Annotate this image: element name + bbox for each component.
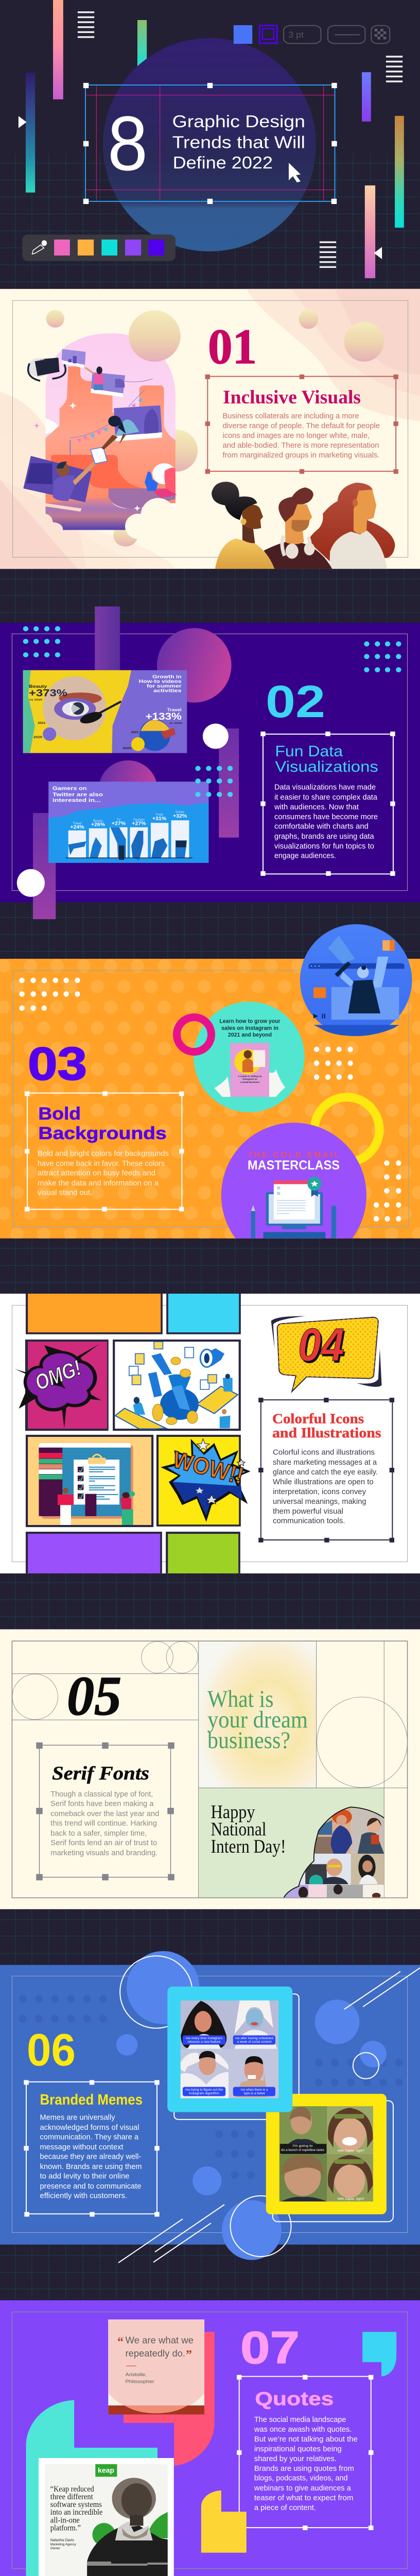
body text: diverse range of people. The default for people — [222, 422, 380, 430]
image labels: 2020 — [122, 747, 131, 750]
body text: But we’re not talking about the — [254, 2435, 358, 2444]
instagram guide text: sales on Instagram in — [221, 1025, 278, 1031]
quote text: Philosopher — [126, 2379, 154, 2385]
keap text: all-in-one — [50, 2516, 80, 2524]
title: Trends that Will — [172, 133, 305, 151]
heading: Fun Data — [275, 743, 343, 760]
chart labels: Travel — [73, 822, 81, 825]
number 07: 07 — [240, 2322, 300, 2373]
ring: pink — [177, 1017, 211, 1052]
body text: Though a classical type of font, — [50, 1790, 153, 1799]
image labels: 2020 — [33, 736, 42, 739]
body text: shared by your relatives. — [254, 2455, 337, 2463]
body text: visual stand out. — [38, 1189, 92, 1197]
body text: marketing visuals and branding. — [50, 1849, 157, 1857]
title — [108, 100, 305, 187]
heading — [272, 1411, 381, 1440]
instagram guide text: 2021 and beyond — [228, 1032, 272, 1038]
hero circle — [103, 38, 316, 251]
chart labels: +24% — [70, 824, 84, 831]
illustration: collaborative screens — [23, 310, 181, 539]
illustration: three people — [212, 482, 395, 569]
chart labels: +31% — [152, 816, 167, 822]
instagram guide text: a Small Business — [240, 1081, 260, 1083]
chart labels: TV — [117, 819, 120, 822]
comic panels — [12, 1294, 408, 1573]
body text: visualizations for fun topics to — [274, 842, 374, 851]
instagram guide text: Learn how to grow your — [219, 1019, 281, 1025]
section background and quote shapes — [0, 2300, 420, 2576]
selection frame — [83, 83, 337, 204]
purple circle: email masterclass — [221, 1123, 366, 1239]
sample: dream business — [207, 1686, 308, 1754]
body text: known. Brands are using them — [40, 2163, 142, 2171]
bar chart: gamers on twitter — [48, 782, 208, 863]
body text: comfortable with charts and — [274, 823, 369, 831]
body text — [274, 784, 378, 860]
keap text: software systems — [50, 2500, 102, 2509]
body text: acknowledged forms of visual — [40, 2124, 139, 2132]
meme captions: me trying to figure out the — [185, 2088, 223, 2092]
body text: attract attention on busy feeds and — [38, 1170, 155, 1178]
blue circle: megaphone hero — [300, 924, 412, 1036]
meme captions: I'm going to — [292, 2144, 313, 2148]
panel: 01 inclusive visuals — [0, 289, 420, 569]
title: 8 — [108, 100, 148, 187]
number 04 shadow: 04 — [300, 1321, 346, 1373]
image labels: +373% — [29, 688, 67, 699]
quote text: “ — [117, 2335, 124, 2349]
illustration: OMG burst — [15, 1344, 101, 1428]
keap text: platform.” — [50, 2523, 81, 2532]
image labels: Growth in — [152, 674, 182, 680]
image labels: Travel — [167, 707, 182, 712]
meme captions: With Zapier, right? — [338, 2149, 364, 2153]
icon: cursor — [289, 163, 301, 182]
meme captions: me after having scheduled — [235, 2037, 274, 2040]
body text: webinars to give audiences a — [254, 2484, 352, 2493]
number 03: 03 — [28, 1039, 87, 1090]
keap text: Marketing Agency — [50, 2543, 77, 2546]
burst word: WOW!! — [170, 1446, 247, 1489]
body text: consumers have become more — [274, 813, 378, 821]
illustration: WOW burst — [161, 1439, 251, 1522]
sample: dream business: What is — [207, 1686, 274, 1713]
inner frame and dots — [13, 970, 409, 1227]
toolbar — [234, 25, 390, 44]
body text: inspirational quotes being — [254, 2445, 342, 2453]
heading: Backgrounds — [38, 1124, 167, 1143]
panel: 07 quotes — [0, 2300, 420, 2576]
body text: teaser of what to expect from — [254, 2494, 353, 2502]
masterclass shapes — [221, 1123, 366, 1239]
panel: 04 colorful icons and illustrations — [0, 1294, 420, 1573]
ring — [231, 2196, 291, 2257]
chart image: how-to videos — [23, 670, 187, 753]
heading: Visualizations — [275, 758, 378, 775]
illustration: checklist board — [39, 1443, 135, 1525]
meme captions — [281, 2144, 364, 2201]
body text: Serif fonts have been making a — [50, 1800, 154, 1808]
image labels: for summer — [147, 684, 182, 689]
heading: Colorful Icons — [272, 1411, 364, 1426]
image labels: Beauty — [29, 684, 47, 689]
keap text: into an incredible — [50, 2508, 102, 2517]
number 05: 05 — [67, 1666, 121, 1727]
section background and decor — [0, 1951, 420, 2245]
panel: 06 branded memes — [0, 1951, 420, 2263]
body text: icons and images are no longer white, male, — [222, 432, 370, 440]
body text: Data visualizations have made — [274, 784, 376, 792]
meme card: cyan — [167, 1987, 299, 2120]
text box frame — [258, 1398, 394, 1543]
quote text — [117, 2335, 194, 2385]
keap text: “Keap reduced — [50, 2485, 94, 2494]
body text: While illustrations are open to — [273, 1478, 374, 1486]
body text: communication. They share a — [40, 2133, 139, 2142]
section background and grid — [0, 1629, 420, 1909]
sample: intern day text — [211, 1802, 286, 1857]
meme captions: With Zapier, right? — [338, 2197, 364, 2201]
body text: The social media landscape — [254, 2416, 346, 2424]
section background and decor — [0, 606, 420, 919]
sample: intern day text: National — [211, 1819, 267, 1840]
body text: Bold and bright colors for backgrounds — [38, 1150, 169, 1158]
heading: Inclusive Visuals — [223, 387, 361, 408]
body text: with audiences. Now that — [274, 803, 359, 811]
heading: Bold — [38, 1104, 81, 1124]
chart bars — [48, 782, 208, 863]
bottom decor circles — [118, 2196, 291, 2263]
burst shape — [161, 1439, 251, 1522]
text box frame — [36, 1742, 174, 1880]
masterclass text — [248, 1152, 339, 1170]
body text: them powerful visual — [273, 1507, 343, 1516]
body text — [273, 1449, 378, 1526]
chart labels: Gamers on — [52, 785, 87, 791]
meme captions — [185, 2037, 274, 2095]
dot cluster — [195, 766, 233, 797]
quote text: repeatedly do. — [126, 2348, 185, 2359]
ring: yellow — [314, 1097, 379, 1162]
keap text: keap — [98, 2466, 114, 2475]
meme captions: do a bunch of repetitive tasks — [281, 2148, 325, 2152]
body text: make the data and information on a — [38, 1179, 159, 1188]
chart labels — [52, 785, 187, 831]
bubble shape — [271, 1316, 382, 1392]
quote text: We are what we — [126, 2335, 194, 2346]
body text: universal meanings, making — [273, 1498, 366, 1506]
number 04: 04 — [298, 1319, 344, 1371]
card shapes — [108, 2319, 204, 2415]
image labels: How-to videos — [139, 679, 182, 685]
body text: presence and to communicate — [40, 2182, 141, 2191]
body text: Serif fonts lend an air of trust to — [50, 1839, 157, 1848]
instagram guide text: A Guide to Selling on — [238, 1075, 262, 1078]
heading: and Illustrations — [272, 1425, 381, 1440]
title: Define 2022 — [173, 153, 273, 172]
filled circle — [222, 2200, 282, 2260]
body text: from marginalized groups in marketing visuals. — [222, 451, 380, 460]
card and photos — [266, 2094, 393, 2222]
masterclass text: THE COLD EMAIL — [248, 1151, 339, 1159]
panel: 05 serif fonts — [0, 1629, 420, 1909]
body text: graphs, brands are using data — [274, 833, 375, 841]
meme captions: Instagram algorithm — [189, 2092, 219, 2095]
body text: back to a safer, simpler time, — [50, 1829, 147, 1838]
sample: dream business: your dream — [207, 1706, 308, 1733]
header decorations — [19, 0, 404, 278]
quote text: ” — [186, 2348, 192, 2362]
body text — [38, 1150, 169, 1197]
text box frame — [25, 1091, 184, 1211]
image labels: activities — [153, 688, 182, 694]
image labels: 2021 — [131, 731, 139, 734]
body text: message without context — [40, 2143, 124, 2151]
body text: efficiently with customers. — [40, 2192, 127, 2200]
body text: interpretation, icons convey — [273, 1488, 366, 1496]
chart labels: +27% — [132, 821, 146, 827]
sample: intern day text: Intern Day! — [211, 1836, 286, 1857]
instagram guide text — [219, 1019, 281, 1083]
chart labels: Beauty — [93, 820, 103, 823]
diagonal lines — [118, 2205, 224, 2263]
heading: Quotes — [255, 2388, 334, 2410]
body text: because they are already well- — [40, 2153, 141, 2161]
body text: blogs, podcasts, videos, and — [254, 2475, 348, 2483]
colour palette — [22, 234, 176, 261]
image labels: vs 2020 — [169, 722, 183, 724]
body text: to add levity to their online — [40, 2173, 130, 2181]
text box frame — [205, 375, 398, 474]
meme captions: releases a new feature — [187, 2040, 221, 2044]
number 01: 01 — [208, 319, 257, 374]
image labels: vs 2020 — [29, 699, 43, 701]
body text: this trend will continue. Harking — [50, 1820, 157, 1828]
image shapes — [23, 670, 187, 753]
meme captions: typo in a tweet — [244, 2092, 265, 2095]
title: Graphic Design — [172, 112, 305, 131]
photo collage — [284, 1805, 384, 1899]
burst shape — [15, 1344, 101, 1428]
body text: comeback over the last year and — [50, 1810, 159, 1818]
section background — [0, 289, 420, 569]
body text: share marketing messages at a — [273, 1459, 377, 1467]
burst word: OMG! — [31, 1355, 84, 1395]
body text: communication tools. — [273, 1517, 345, 1526]
card shapes — [39, 2458, 174, 2576]
heading: Serif Fonts — [52, 1763, 149, 1784]
meme captions: a week of social content — [237, 2040, 272, 2044]
body text: a piece of content. — [254, 2504, 316, 2512]
heading: Branded Memes — [40, 2092, 143, 2108]
body text: Brands are using quotes from — [254, 2465, 354, 2473]
meme card: yellow — [266, 2094, 393, 2222]
quote card: aristotle — [108, 2319, 204, 2415]
quote card: keap — [39, 2458, 174, 2576]
chart labels: +32% — [173, 813, 187, 819]
quote text: Aristotle, — [126, 2372, 147, 2378]
polka pattern — [0, 959, 420, 1239]
body text: engage audiences. — [274, 852, 336, 860]
illustration: money marketing — [115, 1342, 238, 1429]
keap text: three different — [50, 2493, 93, 2501]
masterclass text: MASTERCLASS — [248, 1158, 340, 1173]
speech bubble — [271, 1316, 382, 1392]
keap text: Natasha Davis — [50, 2539, 74, 2543]
sample: dream business: business? — [207, 1727, 290, 1754]
body text: and able-bodied. There is more representation — [222, 442, 379, 450]
chart labels: Twitter are also — [52, 791, 103, 798]
body text — [254, 2416, 358, 2512]
instagram guide text: Instagram as — [242, 1078, 257, 1080]
image labels — [29, 674, 183, 750]
image labels: 2021 — [38, 722, 46, 725]
number 02: 02 — [266, 676, 325, 727]
section background — [0, 959, 420, 1239]
keap text — [50, 2466, 114, 2550]
heading — [275, 743, 378, 775]
header panel — [19, 0, 404, 278]
image labels: +133% — [146, 711, 182, 722]
chart labels: +27% — [112, 821, 126, 827]
body text — [50, 1790, 159, 1857]
body text: it easier to share complex data — [274, 793, 378, 802]
number 06: 06 — [27, 2024, 76, 2075]
heading — [38, 1104, 167, 1143]
body text: glance and catch the eye easily. — [273, 1468, 378, 1477]
body text — [222, 412, 380, 460]
card and photos — [167, 1987, 299, 2120]
meme captions: me every time Instagram — [186, 2037, 222, 2040]
body text — [40, 2114, 142, 2200]
toolbar label: 3 pt — [288, 30, 304, 40]
body text: Colorful icons and illustrations — [273, 1449, 375, 1457]
chart labels: interested in... — [52, 798, 101, 804]
teal circle: instagram guide — [194, 1002, 305, 1112]
text box frame — [201, 2375, 373, 2553]
body text: Business collaterals are including a more — [222, 412, 359, 420]
chart labels: +26% — [91, 822, 106, 828]
section background — [0, 1294, 420, 1573]
keap text: Owner — [50, 2547, 61, 2550]
chart labels: Fashion — [133, 819, 145, 822]
text box frame — [260, 732, 395, 876]
body text: Memes are universally — [40, 2114, 115, 2122]
chart labels: Drinks — [176, 811, 184, 814]
text box frame — [24, 2080, 160, 2216]
body text: was once awash with quotes. — [254, 2426, 352, 2434]
panel: 02 fun data visualizations — [0, 606, 420, 919]
meme captions: me when there is a — [241, 2088, 268, 2092]
chart labels: Food — [156, 814, 163, 817]
sample: intern day text: Happy — [211, 1802, 255, 1823]
body text: have come back in favor. These colors — [38, 1160, 165, 1168]
panel: 03 bold backgrounds — [0, 924, 420, 1268]
